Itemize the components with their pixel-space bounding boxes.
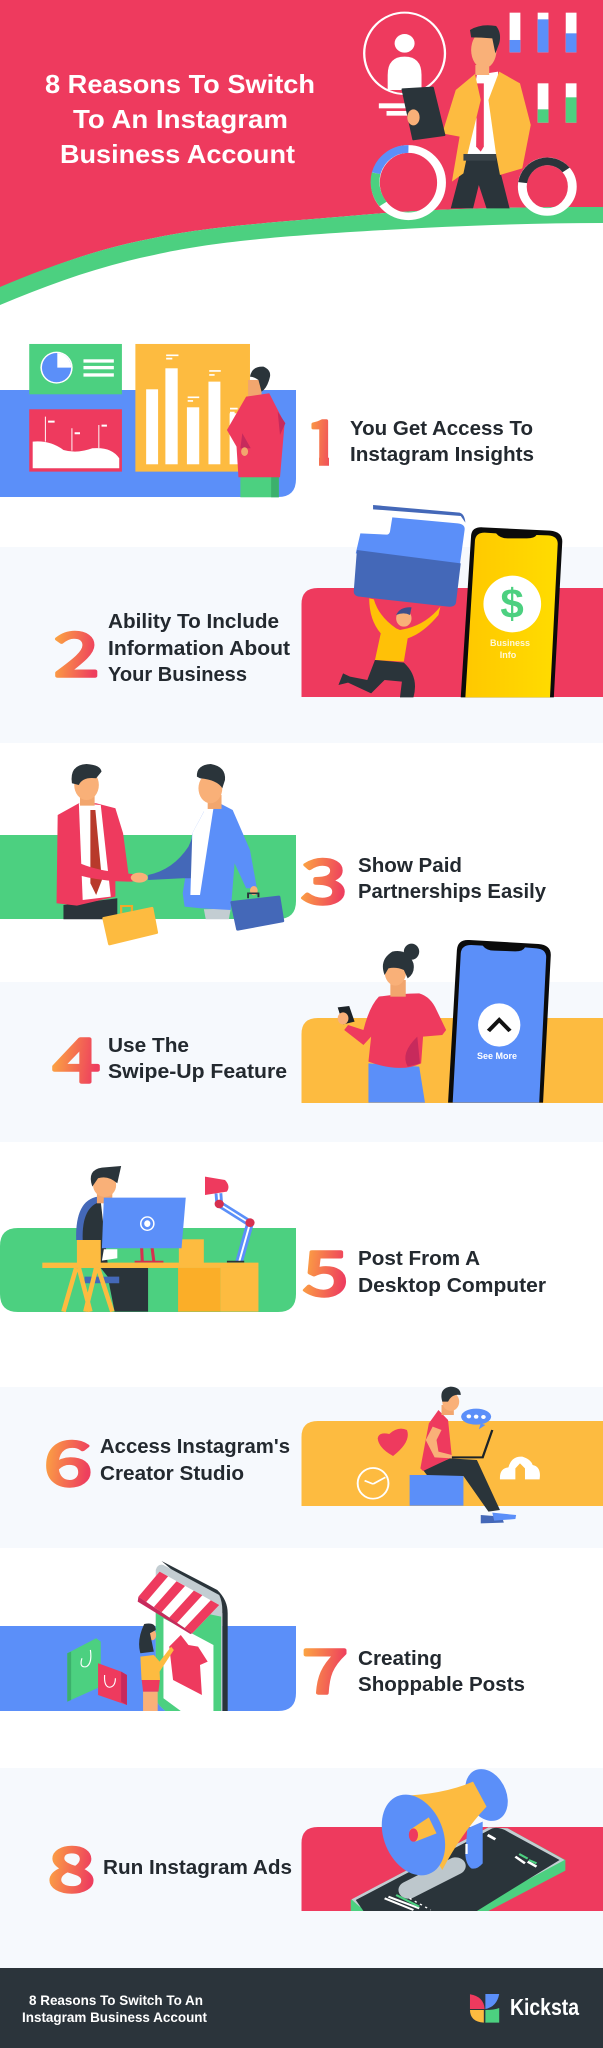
light section background bbox=[0, 1768, 603, 1968]
woman bbox=[338, 944, 446, 1103]
light section background bbox=[0, 982, 603, 1142]
header red curve fill bbox=[0, 0, 603, 288]
number 4: 4 bbox=[53, 1013, 100, 1100]
heading: Swipe-Up Feature bbox=[108, 1061, 287, 1083]
businessman bbox=[403, 25, 531, 208]
illustration: shopping on phone bbox=[67, 1561, 228, 1711]
shopping bags bbox=[67, 1638, 127, 1705]
awning bbox=[138, 1572, 219, 1634]
heading: Shoppable Posts bbox=[358, 1674, 525, 1696]
chat bubble icon bbox=[461, 1409, 491, 1429]
cloud upload icon bbox=[500, 1457, 540, 1479]
reason 4 bbox=[0, 940, 603, 1142]
isometric phone bbox=[351, 1827, 565, 1911]
phone with swipe-up icon bbox=[448, 940, 551, 1103]
phone caption: Business bbox=[490, 638, 530, 648]
shopper bbox=[139, 1623, 174, 1711]
heading bbox=[100, 1436, 290, 1485]
heading: Your Business bbox=[108, 664, 247, 686]
illustration: two businessmen shaking hands bbox=[57, 764, 283, 944]
number 7: 7 bbox=[302, 1624, 348, 1711]
person and chair bbox=[76, 1166, 148, 1312]
Kicksta logo mark bbox=[470, 1994, 499, 2023]
heading bbox=[358, 1248, 546, 1297]
phone caption: See More bbox=[477, 1051, 517, 1061]
number 3: 3 bbox=[301, 834, 347, 921]
illustration: woman and phone bbox=[338, 940, 551, 1103]
illustration: creator with laptop bbox=[358, 1387, 540, 1523]
heading: Information About bbox=[108, 638, 290, 660]
bar indicators bbox=[510, 13, 577, 123]
desktop monitor bbox=[102, 1198, 186, 1262]
footer bar bbox=[0, 1968, 603, 2048]
illustration: person carrying folder and phone bbox=[338, 505, 562, 697]
heading bbox=[358, 1648, 525, 1696]
donut chart left bbox=[375, 149, 442, 216]
megaphone bbox=[371, 1764, 515, 1882]
footer title bbox=[22, 1992, 207, 2025]
illustration: analytics dashboard with person bbox=[29, 344, 285, 497]
reason 7 bbox=[0, 1561, 525, 1711]
storefront phone bbox=[156, 1561, 228, 1711]
number 6: 6 bbox=[44, 1416, 92, 1503]
title bbox=[45, 69, 315, 169]
yellow banner bbox=[302, 1421, 603, 1506]
footer bbox=[0, 1968, 603, 2048]
blue briefcase bbox=[232, 893, 283, 929]
blue banner bbox=[0, 1626, 296, 1711]
footer title: Instagram Business Account bbox=[22, 2009, 207, 2025]
dollar sign: $ bbox=[500, 580, 524, 627]
heading: Creating bbox=[358, 1648, 442, 1670]
person looking at charts bbox=[227, 367, 285, 497]
number 2: 2 bbox=[54, 607, 99, 694]
heading: Access Instagram's bbox=[100, 1436, 290, 1458]
reason 3 bbox=[0, 764, 547, 944]
heading: Creator Studio bbox=[100, 1463, 244, 1485]
title: To An Instagram bbox=[73, 104, 288, 134]
footer title: 8 Reasons To Switch To An bbox=[29, 1992, 203, 2008]
heading: Ability To Include bbox=[108, 611, 279, 633]
heading: Partnerships Easily bbox=[358, 881, 547, 903]
man in red jacket bbox=[57, 764, 148, 919]
heading: Run Instagram Ads bbox=[103, 1857, 292, 1879]
heading: Post From A bbox=[358, 1248, 480, 1270]
heading: Instagram Insights bbox=[350, 444, 534, 466]
Kicksta wordmark: Kicksta bbox=[510, 1994, 579, 2020]
heading: Use The bbox=[108, 1035, 189, 1057]
illustration: megaphone on phone bbox=[351, 1764, 565, 1911]
red area chart card bbox=[29, 409, 122, 472]
man in blue jacket bbox=[148, 764, 258, 919]
yellow bar chart card bbox=[135, 344, 250, 472]
yellow banner bbox=[302, 1018, 603, 1103]
phone caption: Info bbox=[500, 650, 517, 660]
reason 1 bbox=[0, 344, 534, 497]
reason 2 bbox=[0, 505, 603, 743]
reason 6 bbox=[0, 1387, 603, 1548]
clock icon bbox=[358, 1468, 388, 1499]
header illustration: businessman with charts bbox=[364, 13, 577, 216]
reason 5 bbox=[0, 1166, 546, 1313]
number 5: 5 bbox=[303, 1226, 348, 1313]
green banner bbox=[0, 1228, 296, 1312]
header panel bbox=[0, 0, 603, 305]
person on laptop bbox=[420, 1387, 516, 1523]
heading bbox=[350, 418, 534, 466]
heading: Show Paid bbox=[358, 855, 462, 877]
phone with dollar icon bbox=[461, 527, 562, 697]
profile ring icon bbox=[364, 13, 445, 116]
desk bbox=[42, 1239, 258, 1312]
green banner bbox=[0, 835, 296, 919]
blue folder bbox=[354, 505, 465, 607]
light section background bbox=[0, 547, 603, 743]
desk lamp bbox=[205, 1177, 255, 1262]
heart icon bbox=[378, 1429, 408, 1456]
person bbox=[338, 598, 440, 697]
number 1: 1 bbox=[306, 395, 339, 482]
title: 8 Reasons To Switch bbox=[45, 69, 315, 99]
heading: Desktop Computer bbox=[358, 1275, 546, 1297]
heading bbox=[108, 611, 290, 686]
light section background bbox=[0, 1387, 603, 1548]
heading: You Get Access To bbox=[350, 418, 533, 440]
heading bbox=[358, 855, 547, 903]
title: Business Account bbox=[60, 139, 295, 169]
blue seat box bbox=[410, 1475, 463, 1506]
red banner bbox=[302, 588, 603, 697]
illustration: person at desktop computer bbox=[42, 1166, 258, 1312]
yellow briefcase bbox=[104, 906, 157, 944]
blue banner bbox=[0, 390, 296, 497]
number 8: 8 bbox=[48, 1822, 95, 1909]
green pie card bbox=[29, 344, 122, 394]
red banner bbox=[302, 1827, 603, 1911]
phone caption bbox=[490, 638, 530, 660]
green swoosh bbox=[0, 207, 603, 305]
donut chart right bbox=[522, 161, 572, 212]
heading bbox=[108, 1035, 287, 1083]
reason 8 bbox=[0, 1764, 603, 1968]
